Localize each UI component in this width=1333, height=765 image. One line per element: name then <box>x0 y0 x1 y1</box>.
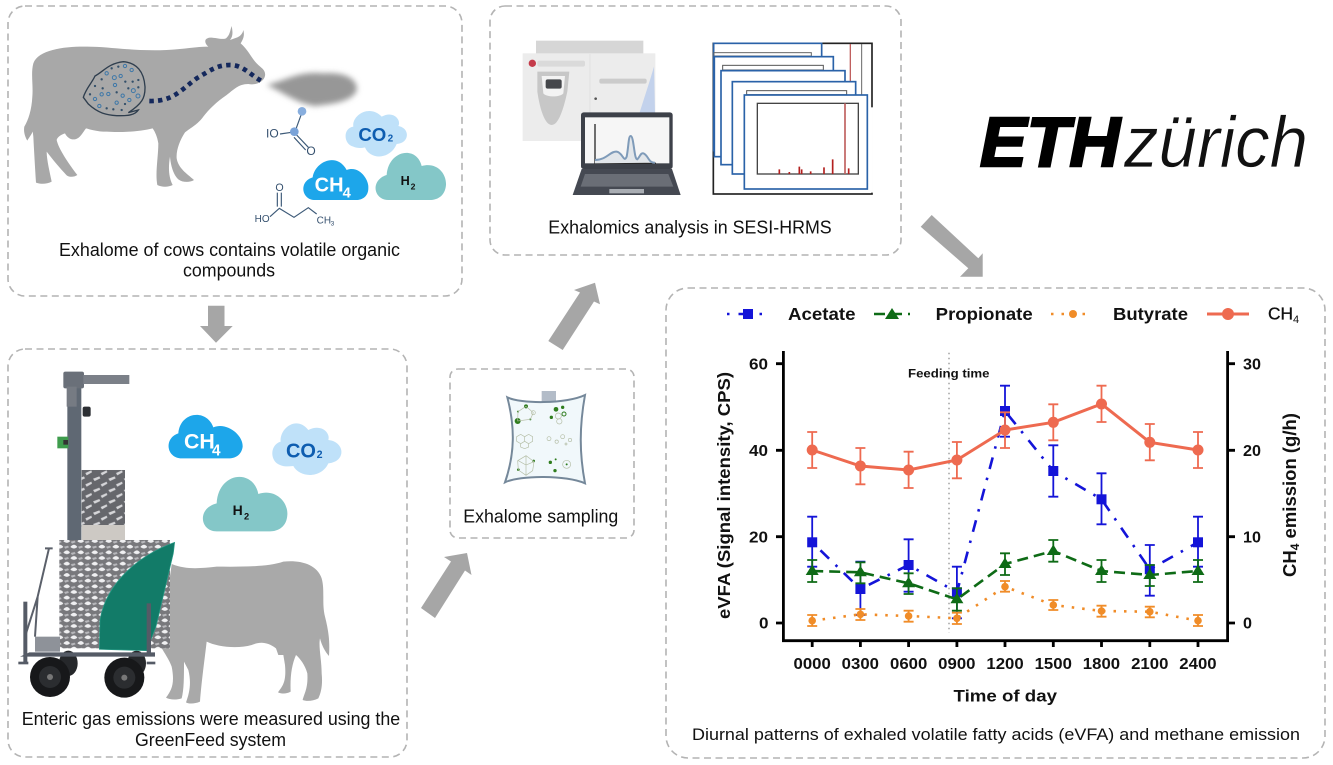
side rod <box>25 548 53 637</box>
illustration: GreenFeed and cow <box>18 372 341 704</box>
caption: diurnal patterns: Diurnal patterns of exhaled volatile fatty acids (eVFA) and methane emission <box>692 726 1300 744</box>
x axis title: Time of day <box>954 687 1058 706</box>
cloud: CO2: CO <box>358 124 386 145</box>
icon: cow silhouette <box>155 561 329 704</box>
x axis tick labels: 0600 <box>890 656 927 673</box>
right axis tick labels: 20 <box>1243 443 1261 460</box>
molecule: carboxyl structure: IO <box>266 127 279 141</box>
logo: ETH zurich <box>980 103 1308 183</box>
cloud: CO2: CO <box>286 440 316 462</box>
vent pipe <box>63 372 129 407</box>
mass spectrometer <box>523 41 655 141</box>
cloud: CH4: 4 <box>343 185 352 201</box>
panel: diurnal patterns chart <box>666 288 1325 758</box>
molecule: carboxyl structure: O <box>306 144 316 158</box>
cloud: H2 <box>376 153 446 200</box>
laptop <box>573 112 681 195</box>
arrow: analysis to chart <box>921 215 983 277</box>
arrow: GreenFeed to sampling <box>421 553 472 618</box>
arrow: sampling to analysis <box>548 283 600 350</box>
molecule: butyric acid: HO <box>255 214 270 225</box>
icon: cow silhouette <box>24 26 265 187</box>
molecule: butyric acid <box>255 182 335 227</box>
series: propionate <box>806 540 1204 611</box>
icon: sampling bag <box>505 391 585 483</box>
rumen outline <box>83 62 145 116</box>
x axis tick labels: 1200 <box>986 656 1024 673</box>
green hood <box>99 542 175 651</box>
rumen particles <box>93 64 140 108</box>
stacked spectra <box>713 43 873 194</box>
right y axis title: emission (g/h) <box>1279 413 1300 544</box>
caption: GreenFeed <box>22 709 400 750</box>
molecule: butyric acid: O <box>275 182 284 194</box>
left axis tick labels: 40 <box>749 443 768 460</box>
cloud: CH4: 4 <box>212 442 221 459</box>
x axis tick labels: 1800 <box>1083 656 1120 673</box>
cloud: CO2: 2 <box>388 134 394 145</box>
legend: 4 <box>1293 314 1299 326</box>
x axis tick labels <box>794 656 1217 673</box>
panel: GreenFeed system <box>8 349 407 757</box>
illustration: instrument, laptop, spectra <box>523 41 873 195</box>
cloud: H2: H <box>401 174 410 188</box>
logo: ETH zurich: ETH <box>980 103 1121 181</box>
cloud: CH4 <box>169 415 243 459</box>
breath path <box>149 65 263 101</box>
panel: exhalome of cows <box>8 6 462 296</box>
legend: Acetate <box>788 304 856 324</box>
cloud: H2 <box>203 477 287 531</box>
left axis tick labels: 60 <box>749 356 768 373</box>
cloud: CH4 <box>303 160 368 201</box>
caption: sampling: Exhalome sampling <box>463 506 618 526</box>
right axis tick labels <box>1243 356 1261 633</box>
right y axis title: 4 <box>1288 543 1302 550</box>
legend <box>727 304 1299 326</box>
right axis tick labels: 10 <box>1243 529 1261 546</box>
cloud: CH4: CH <box>184 429 215 453</box>
series: CH4 <box>807 386 1204 488</box>
pole <box>67 383 81 540</box>
x axis tick labels: 2400 <box>1179 656 1217 673</box>
left y axis title: eVFA (Signal intensity, CPS) <box>714 372 734 619</box>
feeding time marker: Feeding time <box>908 368 990 380</box>
left axis tick labels <box>749 356 768 633</box>
panel: exhalome sampling <box>450 369 634 538</box>
back wheels <box>59 651 146 676</box>
caption: GreenFeed: GreenFeed system <box>135 730 286 750</box>
x axis tick labels: 0300 <box>842 656 879 673</box>
chart axes <box>776 351 1235 647</box>
smoke plume <box>267 73 357 106</box>
cloud: H2: 2 <box>411 181 416 191</box>
molecule: butyric acid: 3 <box>331 220 335 227</box>
caption: GreenFeed: Enteric gas emissions were measured using the <box>22 709 400 729</box>
lower box <box>59 540 170 648</box>
cloud: CO2 <box>272 423 341 475</box>
right axis tick labels: 0 <box>1243 616 1252 633</box>
molecule: butyric acid: CH <box>317 215 331 226</box>
cloud: CO2: 2 <box>317 449 323 461</box>
wagon frame <box>18 602 155 664</box>
wheels <box>30 657 144 698</box>
molecule: carboxyl structure <box>266 107 316 158</box>
cloud: H2: H <box>233 502 243 518</box>
right axis tick labels: 30 <box>1243 356 1261 373</box>
cloud: CH4: CH <box>315 174 344 196</box>
arrow: panel one down to GreenFeed <box>200 306 233 343</box>
cloud: CO2 <box>346 111 407 156</box>
cloud: H2: 2 <box>244 511 249 521</box>
sensor <box>57 407 91 448</box>
panel: exhalomics analysis <box>490 6 901 255</box>
caption: exhalome of cows: compounds <box>183 261 275 281</box>
left axis tick labels: 0 <box>759 616 768 633</box>
x axis tick labels: 1500 <box>1035 656 1072 673</box>
caption: exhalome of cows <box>59 240 400 281</box>
legend: Butyrate <box>1113 304 1188 324</box>
series: butyrate <box>807 581 1203 626</box>
right y axis title: CH <box>1279 550 1300 577</box>
legend: CH <box>1268 304 1293 324</box>
legend: Propionate <box>936 304 1033 324</box>
caption: exhalomics: Exhalomics analysis in SESI-HRMS <box>548 217 832 237</box>
upper box <box>82 470 125 540</box>
illustration: cow with rumen and gases <box>24 26 446 227</box>
x axis tick labels: 0900 <box>938 656 976 673</box>
x axis tick labels: 0000 <box>794 656 831 673</box>
logo: ETH zurich: zürich <box>1123 103 1308 183</box>
series: acetate <box>807 386 1203 618</box>
caption: exhalome of cows: Exhalome of cows contains volatile organic <box>59 240 400 260</box>
left axis tick labels: 20 <box>749 529 768 546</box>
x axis tick labels: 2100 <box>1131 656 1168 673</box>
